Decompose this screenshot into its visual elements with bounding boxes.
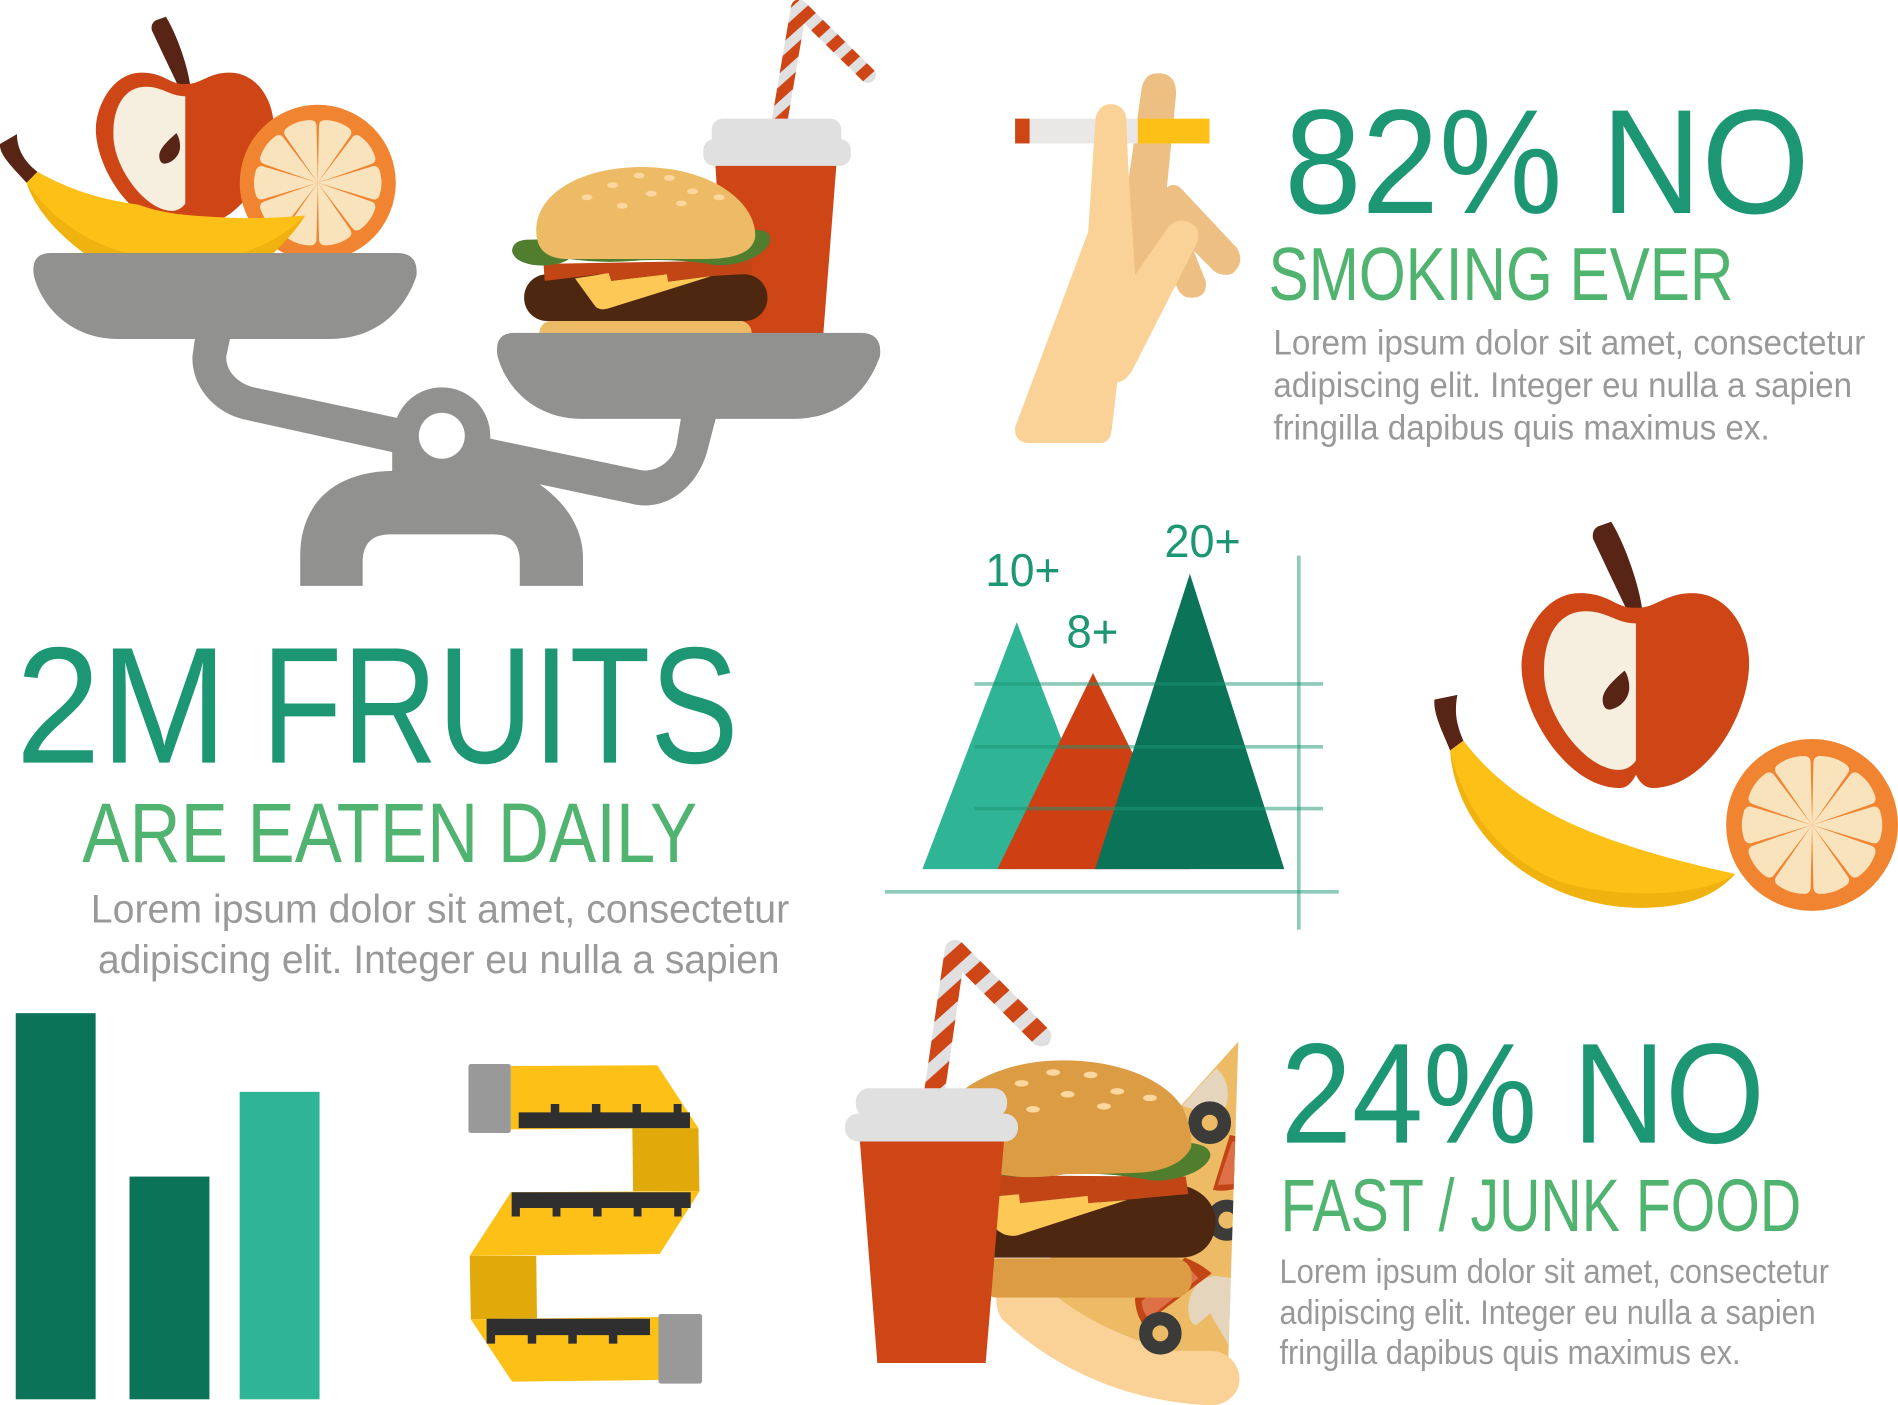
text block: smoking description: adipiscing elit. Integer eu nulla a sapien — [1273, 366, 1852, 405]
text block: junk food description: fringilla dapibus quis maximus ex. — [1279, 1334, 1741, 1372]
heading: 2M fruits: FRUITS — [261, 614, 738, 799]
heading: 82% NO: 82% NO — [1284, 78, 1810, 245]
bar 3 — [240, 1092, 320, 1399]
text block: smoking description — [1273, 324, 1866, 447]
text block: junk food description — [1279, 1253, 1829, 1372]
heading: are eaten daily: ARE EATEN DAILY — [82, 785, 697, 880]
triangle: 8+ — [997, 673, 1190, 869]
text block: smoking description: fringilla dapibus quis maximus ex. — [1273, 408, 1770, 447]
icon: burger with cup and pizza — [845, 950, 1241, 1405]
heading: 24% NO: 24% NO — [1281, 1015, 1765, 1174]
icon: soda cup — [845, 1088, 1018, 1363]
label: 10+: 10+ — [985, 544, 1060, 596]
icon: orange slice on scale — [240, 105, 396, 261]
icon: straw — [934, 950, 1041, 1092]
text block: fruits description: Lorem ipsum dolor sit amet, consectetur — [91, 887, 789, 931]
text block: smoking description: Lorem ipsum dolor sit amet, consectetur — [1273, 324, 1866, 363]
panel: balance scale with fruit versus fast food — [0, 7, 880, 586]
icon: soda cup on scale — [703, 119, 851, 337]
icon: large apple — [1522, 522, 1749, 788]
heading: 2M fruits — [16, 614, 738, 799]
heading: smoking ever: SMOKING EVER — [1269, 232, 1733, 316]
chart: triangle chart — [885, 515, 1339, 930]
bar 1 — [16, 1013, 96, 1399]
icon: straw on scale — [780, 7, 868, 121]
icon: burger on scale — [512, 167, 770, 345]
triangle: 20+ — [1095, 574, 1284, 869]
text block: junk food description: adipiscing elit. Integer eu nulla a sapien — [1279, 1294, 1816, 1332]
icon: scale stand and beam — [192, 339, 716, 586]
icon: hand holding cigarette — [1015, 73, 1240, 443]
text block: fruits description — [91, 887, 789, 982]
icon: large orange slice — [1726, 739, 1898, 911]
icon: apple on scale — [96, 17, 274, 225]
text block: junk food description: Lorem ipsum dolor sit amet, consectetur — [1279, 1253, 1829, 1291]
icon: banana on scale — [0, 134, 305, 257]
chart: bar chart — [16, 1013, 320, 1399]
icon: right scale pan — [497, 333, 880, 419]
label: 20+: 20+ — [1164, 515, 1241, 567]
text block: fruits description: adipiscing elit. Integer eu nulla a sapien — [98, 938, 780, 982]
label: 8+: 8+ — [1066, 606, 1118, 658]
heading: 2M fruits: 2M — [16, 614, 228, 799]
bar 2 — [130, 1177, 209, 1399]
icon: large banana — [1434, 695, 1735, 908]
icon: left scale pan — [33, 253, 417, 339]
icon: burger — [956, 1060, 1216, 1298]
icon: pizza slice — [996, 1042, 1241, 1405]
triangle: 10+ — [922, 622, 1111, 869]
icon: measuring tape — [468, 1064, 702, 1384]
